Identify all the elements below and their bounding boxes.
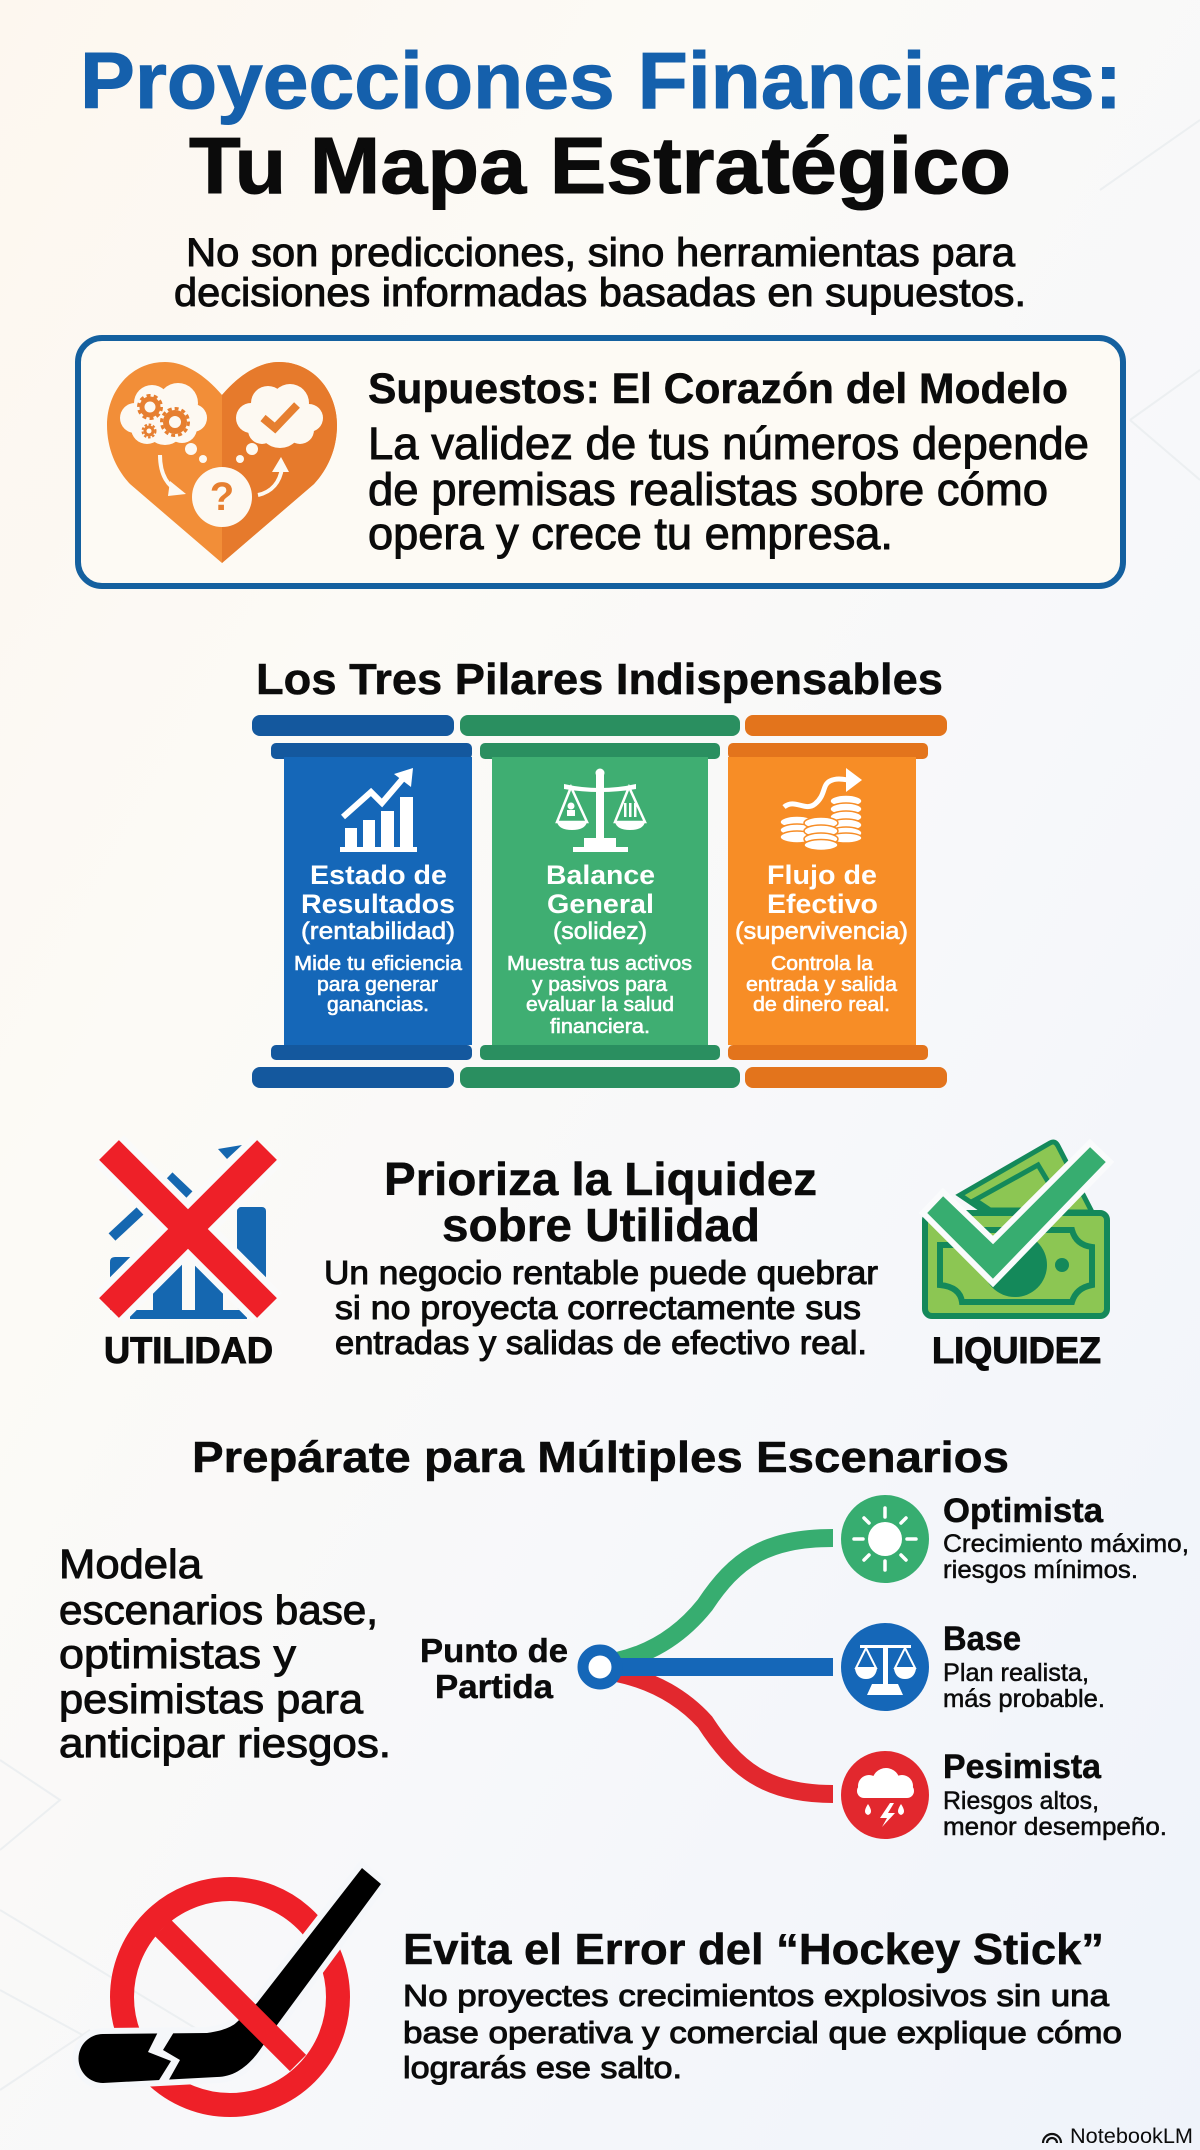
icon: rising bar chart <box>340 768 417 852</box>
scenario: optimista: Optimista <box>943 1492 1104 1530</box>
text: estado de resultados: Mide tu eficiencia <box>294 953 463 975</box>
icon: cash with check mark <box>923 1142 1110 1371</box>
subtitle: No son predicciones, sino herramientas para <box>186 231 1016 275</box>
text block: hockey stick: lograrás ese salto. <box>403 2050 682 2085</box>
text block: prioriza la liquidez: Un negocio rentable puede quebrar <box>324 1254 878 1291</box>
label: punto de partida: Punto de <box>420 1632 568 1669</box>
label: punto de partida: Partida <box>435 1668 554 1705</box>
scenario tree branches <box>583 1538 833 1794</box>
text block: prioriza la liquidez: Prioriza la Liquidez <box>384 1153 817 1205</box>
icon: balance scale <box>557 768 645 852</box>
text: flujo de efectivo <box>735 860 908 1016</box>
scenario: base: Base <box>943 1620 1021 1658</box>
title <box>80 36 1122 210</box>
text: balance general: y pasivos para <box>532 974 668 996</box>
text: balance general: General <box>547 889 654 919</box>
scenario: pesimista <box>841 1748 1167 1841</box>
label: punto de partida <box>420 1632 568 1705</box>
text: flujo de efectivo: entrada y salida <box>746 974 898 996</box>
text: balance general <box>507 860 692 1038</box>
panel text: de premisas realistas sobre cómo <box>368 464 1048 515</box>
text block: prioriza la liquidez: sobre Utilidad <box>442 1199 760 1251</box>
pillar: flujo de efectivo <box>728 715 947 1088</box>
text: flujo de efectivo: (supervivencia) <box>735 918 908 945</box>
icon: sun <box>854 1508 916 1570</box>
text: balance general: financiera. <box>550 1016 650 1038</box>
subtitle <box>174 231 1026 315</box>
scenario: optimista: Crecimiento máximo, <box>943 1530 1189 1558</box>
title: Tu Mapa Estratégico <box>189 121 1011 210</box>
scenario: optimista <box>841 1492 1189 1584</box>
scenario: base <box>841 1620 1105 1713</box>
text block: hockey stick <box>403 1925 1122 2085</box>
pillar: balance general <box>460 715 740 1088</box>
panel heading: Supuestos: El Corazón del Modelo <box>368 365 1068 413</box>
text: estado de resultados: Resultados <box>301 889 455 919</box>
panel: supuestos <box>78 338 1123 586</box>
heading: tres pilares: Los Tres Pilares Indispensables <box>256 655 943 704</box>
label: liquidez: LIQUIDEZ <box>932 1330 1101 1371</box>
text block: modela escenarios: anticipar riesgos. <box>59 1720 391 1766</box>
scenario: pesimista: menor desempeño. <box>943 1813 1167 1841</box>
text block: modela escenarios: optimistas y <box>59 1631 297 1677</box>
text: flujo de efectivo: Flujo de <box>767 860 877 890</box>
text: flujo de efectivo: Efectivo <box>767 889 878 919</box>
text: balance general: Muestra tus activos <box>507 953 692 975</box>
icon: storm cloud <box>857 1768 914 1827</box>
icon: heart with thought clouds: ? <box>210 475 234 519</box>
icon: crossed out profit chart <box>104 1145 273 1371</box>
panel text: La validez de tus números depende <box>368 418 1089 469</box>
text: estado de resultados: para generar <box>317 974 438 996</box>
scenario: base: más probable. <box>943 1685 1105 1713</box>
text block: hockey stick: Evita el Error del “Hockey Stick” <box>403 1925 1104 1974</box>
text: balance general: evaluar la salud <box>526 994 674 1016</box>
text: flujo de efectivo: de dinero real. <box>753 994 890 1016</box>
text: estado de resultados <box>294 860 463 1016</box>
icon: heart with thought clouds <box>107 362 337 563</box>
scenario: pesimista: Pesimista <box>943 1748 1102 1786</box>
scenario: optimista: riesgos mínimos. <box>943 1556 1138 1584</box>
text block: modela escenarios <box>59 1541 391 1766</box>
icon: scale <box>855 1645 916 1695</box>
text: estado de resultados: Estado de <box>310 860 447 890</box>
scenario: base: Plan realista, <box>943 1659 1089 1687</box>
pillar: estado de resultados <box>252 715 472 1088</box>
icon: prohibited broken hockey stick <box>78 1868 381 2105</box>
scenario: pesimista: Riesgos altos, <box>943 1787 1099 1815</box>
text block: prioriza la liquidez <box>324 1153 878 1361</box>
text block: hockey stick: No proyectes crecimientos explosivos sin una <box>403 1978 1110 2013</box>
text: balance general: (solidez) <box>553 918 647 945</box>
text block: prioriza la liquidez: entradas y salidas de efectivo real. <box>335 1324 867 1361</box>
heading: escenarios: Prepárate para Múltiples Escenarios <box>192 1433 1009 1482</box>
text: estado de resultados: (rentabilidad) <box>301 918 455 945</box>
text: flujo de efectivo: Controla la <box>771 953 874 975</box>
text block: modela escenarios: Modela <box>59 1541 202 1587</box>
text: balance general: Balance <box>546 860 655 890</box>
label: utilidad: UTILIDAD <box>104 1330 273 1371</box>
text block: prioriza la liquidez: si no proyecta correctamente sus <box>335 1289 861 1326</box>
watermark: NotebookLM: NotebookLM <box>1070 2125 1193 2148</box>
subtitle: decisiones informadas basadas en supuestos. <box>174 271 1026 315</box>
text block: modela escenarios: pesimistas para <box>59 1676 363 1722</box>
panel text <box>368 418 1089 559</box>
title: Proyecciones Financieras: <box>80 36 1122 125</box>
panel text: opera y crece tu empresa. <box>368 508 893 559</box>
text block: hockey stick: base operativa y comercial que explique cómo <box>403 2015 1122 2050</box>
icon: coins and flow arrow <box>780 768 862 850</box>
text: estado de resultados: ganancias. <box>327 994 429 1016</box>
text block: modela escenarios: escenarios base, <box>59 1587 378 1633</box>
